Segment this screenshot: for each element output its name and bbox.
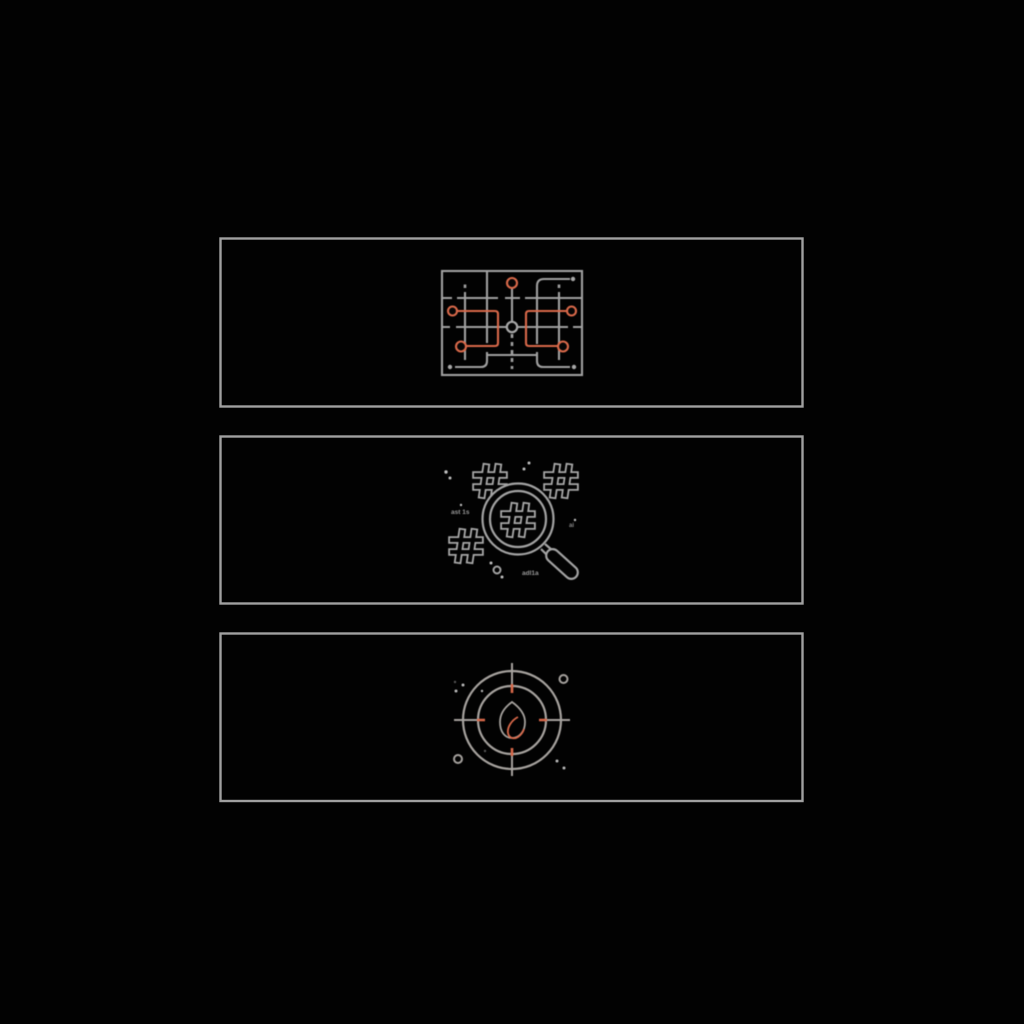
tiny label left: ast 1s: [451, 509, 470, 516]
hashtag top right: [547, 467, 575, 495]
target rings: [454, 663, 570, 776]
panel: middle hashtag search: [220, 436, 802, 604]
panel: bottom target: [220, 634, 802, 801]
circuit traces: orange: [448, 278, 576, 352]
magnifier handle: [541, 544, 580, 582]
small ring: [494, 566, 500, 574]
icon: target with flame: [454, 663, 570, 776]
icon: magnifier with hashtags: [444, 462, 580, 582]
panel: top circuit: [220, 238, 802, 406]
magnifier lens: [482, 484, 554, 554]
tiny label far right: ai: [569, 523, 574, 529]
flame inner curve: [508, 717, 524, 738]
circuit nodes: grey: [448, 277, 576, 369]
tiny label right: adl1a: [522, 570, 539, 577]
icon: circuit grid: [442, 271, 582, 375]
scattered dots: [444, 462, 576, 578]
hashtag lower left: [452, 532, 480, 560]
hashtag in lens: [504, 506, 532, 534]
target dots: [454, 681, 566, 770]
small rings: [560, 675, 568, 683]
hashtag top left: [476, 467, 504, 495]
orange crosshair ticks: [477, 684, 547, 756]
flame outline: [500, 702, 525, 738]
